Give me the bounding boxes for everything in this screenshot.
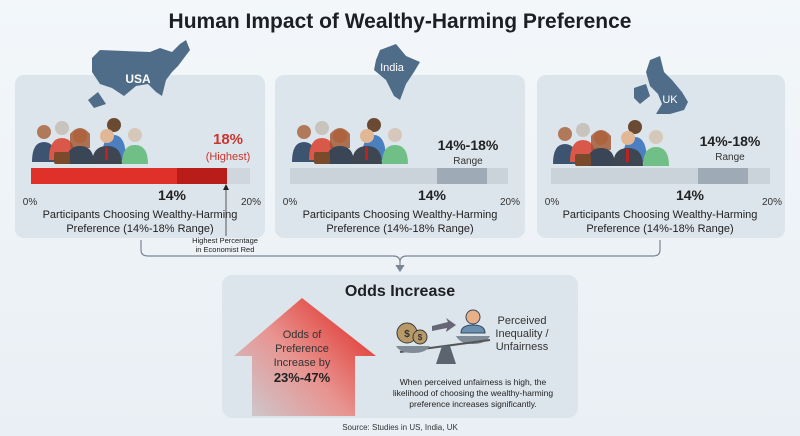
big arrow: 23%-47% xyxy=(274,370,331,385)
icon: UK map xyxy=(634,56,688,114)
icon: scale with money xyxy=(396,310,490,364)
explanatory text: When perceived unfairness is high, the xyxy=(400,377,546,387)
bar chart: USA: 0% xyxy=(23,197,37,208)
panel: UK: Range xyxy=(715,152,745,163)
icon: scale with money: $ xyxy=(404,329,410,340)
panel: USA xyxy=(15,40,265,238)
panel: India: Preference (14%-18% Range) xyxy=(326,223,474,235)
label: perceived inequality: Unfairness xyxy=(496,341,549,353)
icon: UK map: UK xyxy=(662,94,678,106)
annotation: highest percentage xyxy=(192,184,258,254)
label: perceived inequality: Inequality / xyxy=(495,328,550,340)
bar chart: India: 14% xyxy=(418,187,447,203)
panel: UK: Preference (14%-18% Range) xyxy=(586,223,734,235)
big arrow: Preference xyxy=(275,343,329,355)
bar chart: UK: 20% xyxy=(762,197,782,208)
label: perceived inequality: Perceived xyxy=(498,315,546,327)
bar chart: UK xyxy=(545,168,782,208)
annotation: highest percentage: Highest Percentage xyxy=(192,236,258,245)
bar chart: India xyxy=(283,168,520,208)
title: Human Impact of Wealthy-Harming Preference xyxy=(169,10,631,33)
callout: range: Range xyxy=(453,156,483,167)
callout: 18% xyxy=(206,131,250,163)
explanatory text: likelihood of choosing the wealthy-harming xyxy=(393,388,553,398)
panel: India xyxy=(275,44,525,238)
bar chart: India: 20% xyxy=(500,197,520,208)
callout: 18%: (Highest) xyxy=(206,151,250,163)
source: Source: Studies in US, India, UK xyxy=(342,423,458,432)
annotation: highest percentage: in Economist Red xyxy=(196,245,254,254)
icon: USA map xyxy=(88,40,190,108)
bar chart: UK: 0% xyxy=(545,197,559,208)
bar chart: USA: 20% xyxy=(241,197,261,208)
big arrow xyxy=(234,298,376,416)
big arrow: Increase by xyxy=(274,357,331,369)
icon: scale with money: $ xyxy=(418,333,423,342)
explanatory text: preference increases significantly. xyxy=(409,399,537,409)
icon: India map xyxy=(374,44,420,100)
bar chart: USA xyxy=(23,168,261,208)
big arrow: Odds of xyxy=(283,329,321,341)
panel: UK xyxy=(537,56,785,238)
caption: Participants Choosing Wealthy-Harming xyxy=(43,209,237,221)
connector arrows xyxy=(141,240,660,271)
panel: India: Participants Choosing Wealthy-Harming xyxy=(303,209,497,221)
panel: odds increase xyxy=(222,275,578,418)
icon: USA map: USA xyxy=(125,72,151,86)
callout: range xyxy=(438,137,499,167)
caption: Preference (14%-18% Range) xyxy=(66,223,214,235)
heading: Odds Increase xyxy=(345,283,455,300)
panel: UK: 14%-18% xyxy=(700,133,761,149)
people xyxy=(32,118,148,164)
callout: range: 14%-18% xyxy=(438,137,499,153)
bar chart: UK: 14% xyxy=(676,187,705,203)
callout: 18%: 18% xyxy=(213,131,243,148)
icon: India map: India xyxy=(380,62,405,74)
bar chart: India: 0% xyxy=(283,197,297,208)
panel: UK: Participants Choosing Wealthy-Harming xyxy=(563,209,757,221)
bar chart: USA: 14% xyxy=(158,187,187,203)
